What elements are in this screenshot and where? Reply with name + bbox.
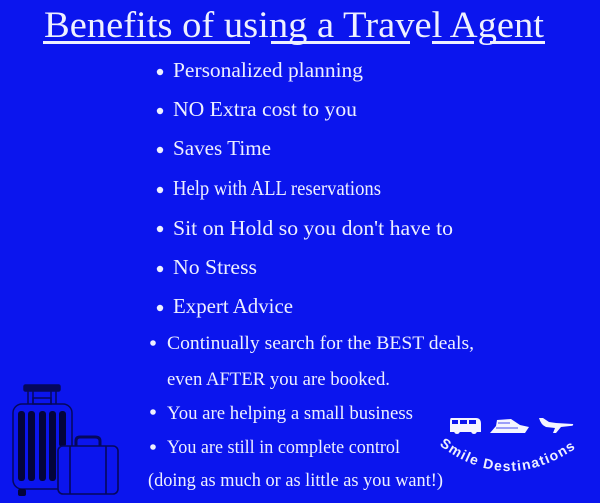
icon: boat [490, 419, 529, 433]
logo: Smile Destinations: Smile Destinations [440, 438, 574, 472]
icon: briefcase [58, 437, 118, 494]
bullet list: additional benefits: (doing as much or as little as you want!) [148, 471, 443, 491]
bullet list: main benefits: Expert Advice [173, 294, 293, 318]
logo text [439, 441, 586, 471]
bullet list: main benefits: Sit on Hold so you don't have to [173, 216, 453, 240]
bullet list: additional benefits: You are still in complete control [167, 438, 400, 458]
bullet list: main benefits: NO Extra cost to you [173, 97, 357, 121]
bullet list: additional benefits: You are helping a small business [167, 404, 413, 424]
bullet list: main benefits: Saves Time [173, 136, 271, 160]
bullet list: main benefits: Personalized planning [173, 58, 364, 82]
bullet list: main benefits [157, 58, 453, 318]
logo: Smile Destinations [440, 418, 574, 472]
icon: rolling suitcase [13, 385, 72, 496]
bullet list: additional benefits: Continually search for the BEST deals, [167, 334, 474, 354]
bullet list: main benefits: Help with ALL reservations [173, 176, 381, 200]
bullet list: additional benefits [148, 334, 474, 491]
title: Benefits of using a Travel Agent [44, 5, 545, 46]
bullet list: additional benefits: even AFTER you are booked. [167, 370, 390, 390]
icon: plane [539, 418, 573, 433]
bullet list: main benefits: No Stress [173, 255, 257, 279]
icon: van [450, 418, 481, 434]
